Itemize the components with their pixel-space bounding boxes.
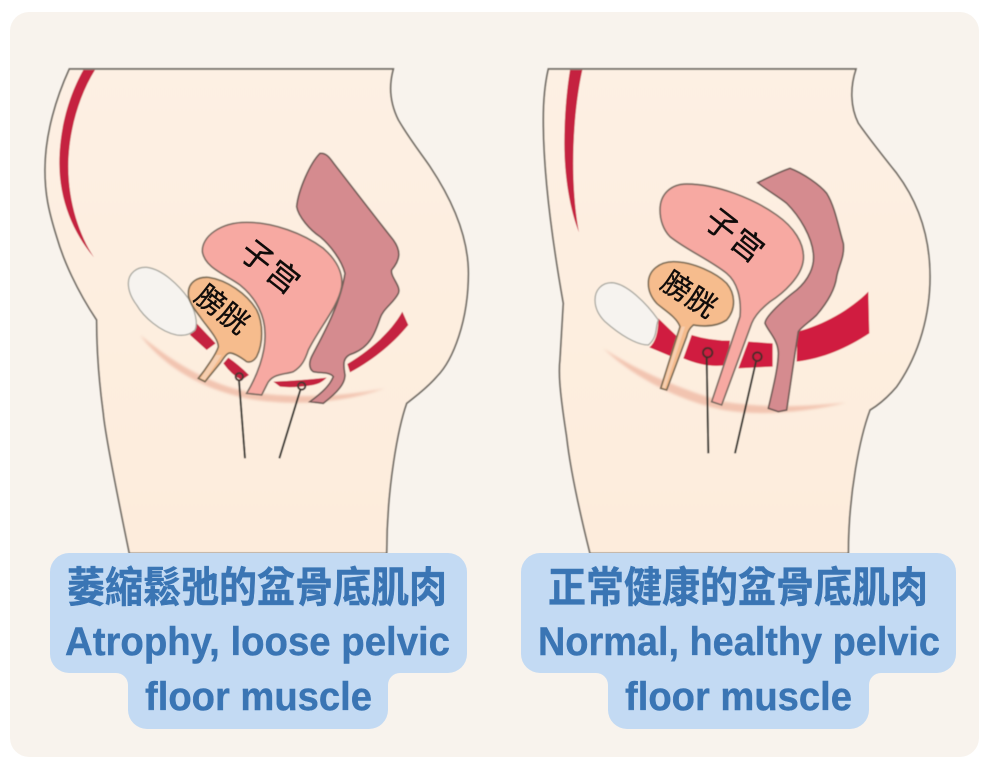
- perineal skin band: [603, 348, 847, 413]
- uterus: [202, 222, 342, 395]
- body silhouette: [543, 69, 930, 553]
- caption: healthy: [521, 553, 956, 729]
- urethra: [201, 355, 222, 380]
- label: uterus (left): 子宫: [233, 233, 308, 302]
- urethra: [662, 327, 685, 388]
- abdominal muscle: [564, 70, 582, 232]
- diagram: healthy pelvic floor: [543, 69, 930, 553]
- caption Chinese line: 正常健康的盆骨底肌肉: [548, 564, 928, 611]
- pin markers: [703, 348, 762, 453]
- pubic bone: [128, 267, 196, 335]
- caption: atrophy: [50, 553, 467, 729]
- caption background: [521, 553, 956, 729]
- bladder: [648, 262, 734, 390]
- label: bladder (right): 膀胱: [655, 265, 722, 325]
- pubic bone: [595, 283, 658, 345]
- caption background: [50, 553, 467, 729]
- label: uterus (right): 子宫: [698, 201, 772, 270]
- perineal skin band: [140, 335, 385, 403]
- caption English line 1: Atrophy, loose pelvic: [65, 620, 450, 664]
- pin markers: [236, 373, 305, 458]
- bladder: [188, 277, 262, 382]
- caption English line 1: Normal, healthy pelvic: [538, 620, 940, 664]
- rectum: [758, 168, 844, 412]
- pelvic floor muscle: thin fragments: [190, 312, 408, 387]
- body silhouette: [45, 69, 468, 553]
- caption English line 2: floor muscle: [625, 675, 852, 719]
- diagram: atrophy pelvic floor: [45, 69, 468, 553]
- rectum: [297, 153, 399, 403]
- caption Chinese line: 萎縮鬆弛的盆骨底肌肉: [67, 564, 447, 611]
- label: bladder (left): 膀胱: [188, 279, 255, 341]
- pelvic floor muscle: thick band: [649, 292, 869, 368]
- caption English line 2: floor muscle: [145, 675, 372, 719]
- uterus: [660, 184, 803, 405]
- abdominal muscle: [59, 70, 95, 257]
